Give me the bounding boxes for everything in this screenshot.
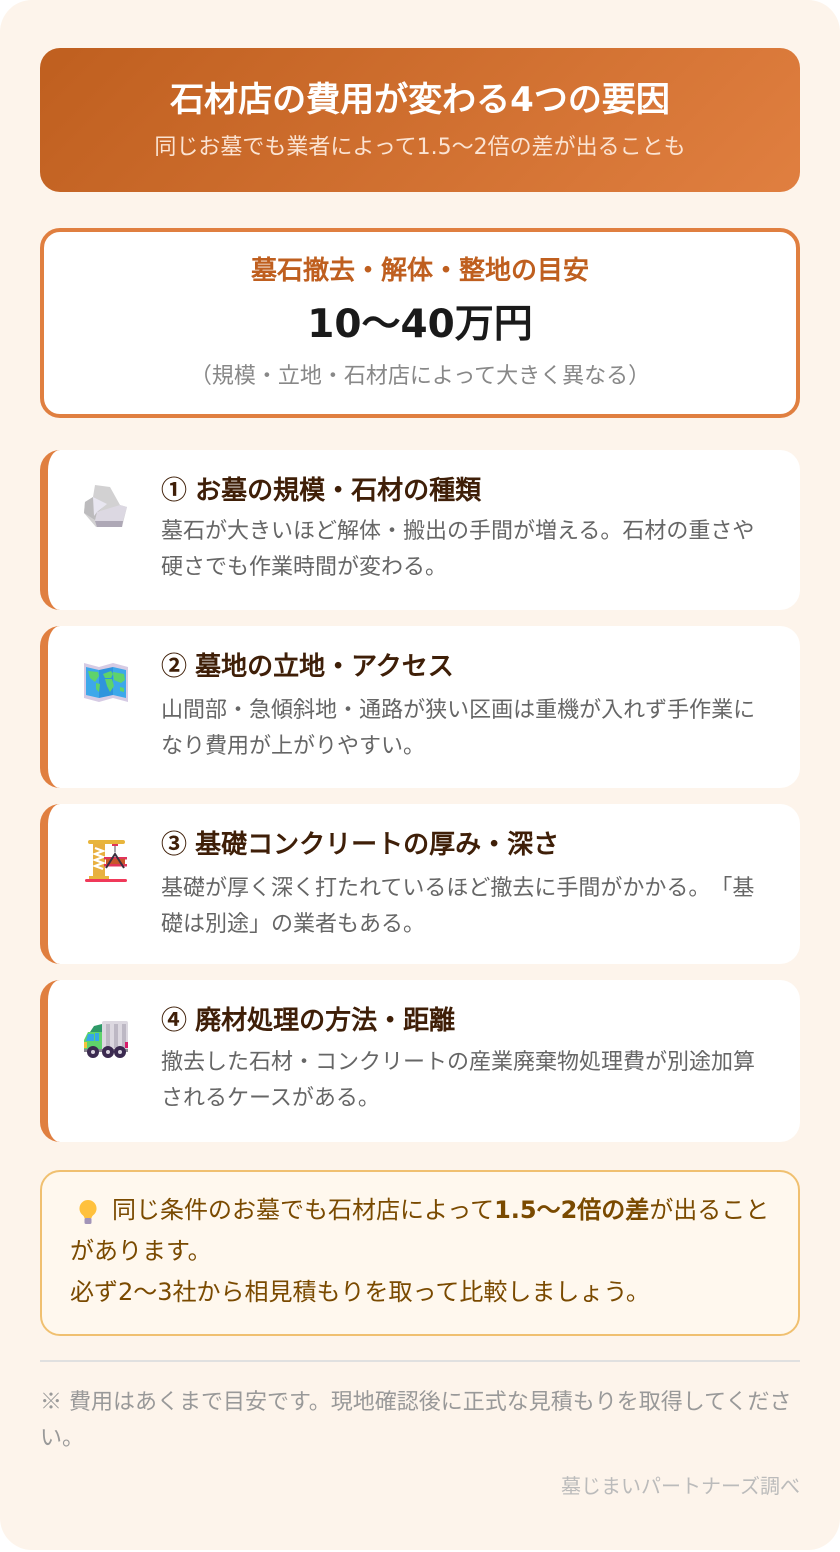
- icon: construction crane: [85, 840, 127, 882]
- summary label: 墓石撤去・解体・整地の目安: [251, 250, 589, 287]
- card 2 heading: ② 墓地の立地・アクセス: [161, 646, 454, 683]
- footnote: ※ 費用はあくまで目安です。現地確認後に正式な見積もりを取得してくださ: [40, 1384, 792, 1416]
- card 2 description: 山間部・急傾斜地・通路が狭い区画は重機が入れず手作業に: [161, 692, 755, 724]
- card 4 description: されるケースがある。: [161, 1086, 380, 1111]
- summary note: （規模・立地・石材店によって大きく異なる）: [190, 358, 650, 390]
- card 2 description: [161, 692, 755, 759]
- card 2 description: なり費用が上がりやすい。: [161, 734, 425, 759]
- footnote: [40, 1384, 792, 1451]
- card 3 description: 礎は別途」の業者もある。: [161, 912, 425, 937]
- card 4 description: 撤去した石材・コンクリートの産業廃棄物処理費が別途加算: [161, 1044, 755, 1076]
- card 1 description: 硬さでも作業時間が変わる。: [161, 555, 447, 580]
- card 4 heading: ④ 廃材処理の方法・距離: [161, 1000, 455, 1037]
- card 3 heading: ③ 基礎コンクリートの厚み・深さ: [161, 824, 559, 861]
- card 1 description: [161, 513, 754, 580]
- card 3: foundation concrete: [40, 804, 800, 964]
- card 4: waste disposal: [40, 980, 800, 1142]
- icon: lorry: [84, 1021, 128, 1058]
- card 3 description: [161, 876, 754, 937]
- footnote: い。: [40, 1426, 84, 1451]
- card 1: scale and stone type: [40, 450, 800, 610]
- card 4 description: [161, 1044, 755, 1111]
- callout line 2: があります。: [70, 1237, 212, 1265]
- summary box: [40, 228, 800, 418]
- header banner: [40, 48, 800, 192]
- callout line 1: 同じ条件のお墓でも石材店によって1.5〜2倍の差が出ること: [112, 1196, 769, 1224]
- callout line 3: 必ず2〜3社から相見積もりを取って比較しましょう。: [70, 1278, 650, 1306]
- icon: world map: [84, 663, 128, 702]
- card 2: location and access: [40, 626, 800, 788]
- card 3 description: 基礎が厚く深く打たれているほど撤去に手間がかかる。「基: [161, 876, 754, 901]
- summary price: 10〜40万円: [307, 302, 533, 347]
- card 1 heading: ① お墓の規模・石材の種類: [161, 470, 481, 507]
- title: 石材店の費用が変わる4つの要因: [170, 80, 670, 120]
- callout: advice: [40, 1170, 800, 1336]
- source credit: 墓じまいパートナーズ調べ: [561, 1474, 800, 1498]
- icon: light bulb: [79, 1200, 97, 1224]
- card 1 description: 墓石が大きいほど解体・搬出の手間が増える。石材の重さや: [161, 513, 754, 545]
- icon: rock: [84, 485, 127, 527]
- subtitle: 同じお墓でも業者によって1.5〜2倍の差が出ることも: [154, 135, 686, 160]
